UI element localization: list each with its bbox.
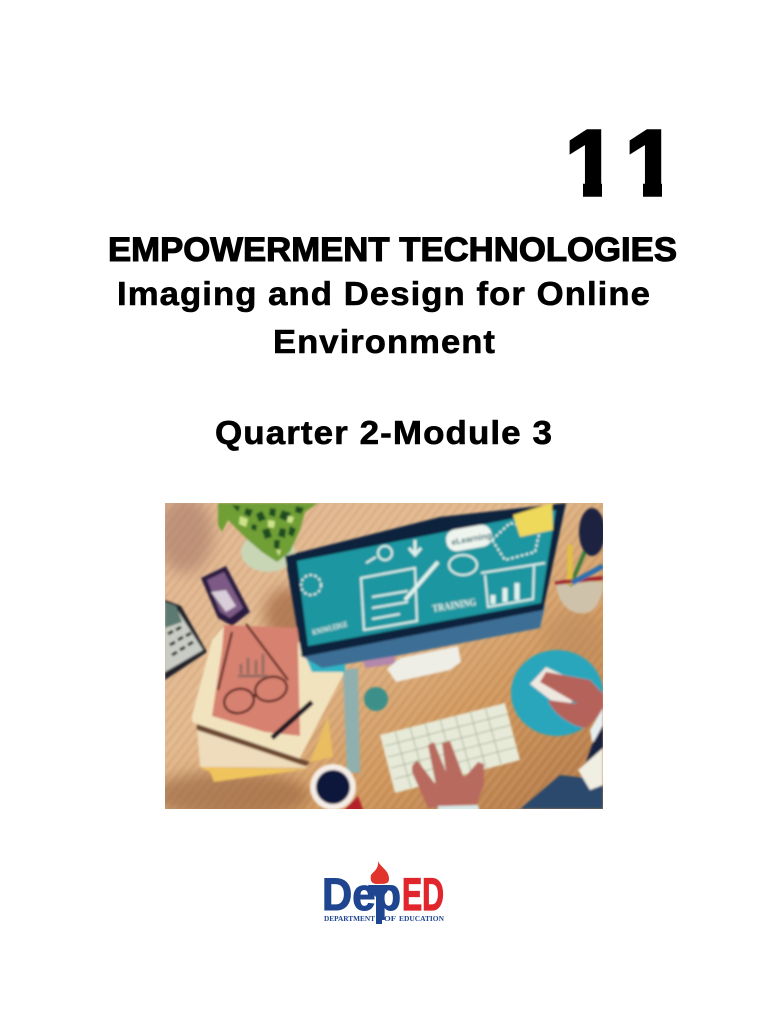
monitor screen	[297, 510, 556, 646]
icon: potted plant	[218, 503, 318, 572]
icon: hand on mouse	[530, 667, 603, 770]
document doodle	[361, 568, 417, 630]
logo caption right: EDUCATION	[399, 915, 445, 923]
icon: eyeglasses on folder	[218, 624, 290, 716]
screen label bubble	[444, 523, 494, 553]
icon: torch flame	[371, 861, 389, 884]
sleeve and paper corner	[520, 748, 603, 809]
presentation board doodle	[481, 563, 545, 607]
stack of papers and folders	[192, 625, 345, 782]
screen text: knowledge: KNOWLEDGE	[311, 619, 348, 637]
logo caption left: DEPARTMENT	[324, 915, 375, 923]
photo: desk with computer	[150, 497, 605, 819]
screen sketches	[301, 523, 545, 630]
monitor chin	[300, 605, 545, 668]
thought bubble doodle	[449, 555, 477, 575]
ruler	[343, 668, 360, 773]
logo wordmark: ED: ED	[402, 869, 444, 920]
logo caption middle: OF	[384, 915, 397, 923]
title: subject: EMPOWERMENT TECHNOLOGIES	[108, 231, 677, 269]
wooden desk	[150, 497, 605, 819]
mouse pad	[511, 650, 603, 736]
arrow doodle	[409, 540, 421, 555]
magnifier doodle	[366, 557, 376, 563]
pen	[272, 702, 312, 738]
icon: calculator	[165, 600, 207, 680]
sticky note yellow	[513, 503, 553, 537]
salmon folder	[212, 625, 300, 736]
icon: typing hand	[412, 741, 484, 812]
quarter and module label: Quarter 2-Module 3	[215, 414, 553, 451]
icon: pen holder	[555, 508, 605, 613]
sticky note purple	[363, 656, 396, 669]
sketch chart on folder	[238, 654, 268, 676]
icon: coffee cup	[310, 764, 364, 812]
screen text: training: TRAINING	[432, 597, 477, 615]
icon: torch handle	[368, 885, 390, 924]
pencil doodle	[405, 562, 438, 600]
logo: DepEd	[322, 861, 445, 924]
title: topic line 2: Environment	[273, 323, 496, 360]
monitor bezel	[285, 503, 566, 657]
network doodle	[492, 523, 540, 560]
screen text: learning: eLearning	[451, 530, 492, 547]
icon: keyboard	[380, 703, 520, 793]
grade number: 11	[565, 111, 677, 215]
sticky note cyan	[306, 658, 347, 674]
page cover	[110, 129, 676, 924]
icon: paper clips holder	[364, 687, 388, 711]
logo wordmark: Dep: Dep	[322, 869, 401, 920]
monitor stand	[387, 646, 461, 682]
gear doodle	[301, 575, 321, 595]
icon: smartphone with glasses case	[201, 566, 250, 626]
title: topic line 1: Imaging and Design for Online	[117, 275, 651, 312]
